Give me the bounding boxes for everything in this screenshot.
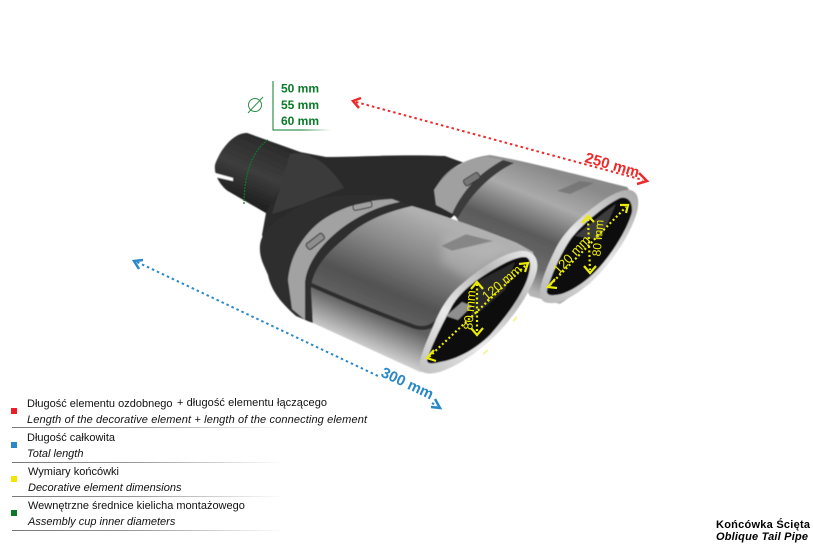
diameter values: 55 mm: [281, 98, 319, 112]
icon: diameter symbol: [248, 97, 263, 113]
legend item: green: [11, 500, 245, 528]
blue arrow: 300 mm: [134, 260, 440, 408]
legend item: blue: Długość całkowita: [27, 432, 116, 444]
legend item: blue: Total length: [27, 448, 83, 460]
legend item: yellow: Decorative element dimensions: [28, 482, 182, 494]
label: 250 mm: 250 mm: [583, 150, 641, 181]
legend item: yellow: [11, 466, 182, 494]
green pipe diameter ring: [244, 140, 268, 204]
legend: [11, 397, 368, 528]
front rim and opening: [420, 251, 537, 374]
callout bracket: [273, 81, 331, 130]
rear rim and opening: [540, 190, 638, 303]
yellow dimensions: front tip: [427, 262, 528, 361]
label: 300 mm: 300 mm: [378, 364, 436, 403]
diameter values: 50 mm: [281, 82, 319, 96]
front decorative tip: [260, 195, 537, 374]
connecting pipe and Y-junction: [215, 133, 470, 300]
yellow dimensions: rear tip: [548, 205, 628, 288]
diameter callout: [248, 81, 331, 130]
legend item: green: Assembly cup inner diameters: [27, 516, 176, 528]
dark band: [305, 202, 412, 323]
legend item: red: Długość elementu ozdobnego: [27, 398, 173, 410]
diameter values: 60 mm: [281, 114, 319, 128]
black cup collar: [260, 195, 405, 322]
product type caption: Oblique Tail Pipe: [716, 531, 808, 543]
yellow dimensions: front tip: 120 mm: [479, 262, 524, 303]
silver band: [288, 199, 400, 320]
product type caption: Końcówka Ścięta: [716, 518, 811, 531]
diameter values: [281, 82, 319, 128]
legend item: green: Wewnętrzne średnice kielicha montażowego: [28, 500, 245, 512]
dark crease line: [309, 284, 456, 328]
yellow dimensions: rear tip: 80 mm: [589, 219, 607, 257]
legend item: red: [11, 397, 368, 426]
product type caption: [716, 518, 811, 543]
legend item: yellow: Wymiary końcówki: [28, 466, 119, 478]
red arrow: 250 mm: [353, 98, 647, 184]
polished body: [311, 206, 537, 372]
yellow dimensions: front tip: 80 mm: [460, 290, 479, 330]
exhaust tail pipe photo: [215, 133, 638, 374]
legend item: blue: [11, 432, 116, 460]
yellow dimensions: rear tip: 120 mm: [550, 232, 593, 277]
legend item: red: + długość elementu łączącego: [177, 397, 327, 409]
rear decorative tip: [434, 155, 638, 304]
legend item: red: Length of the decorative element + length of the connecting element: [27, 414, 368, 426]
